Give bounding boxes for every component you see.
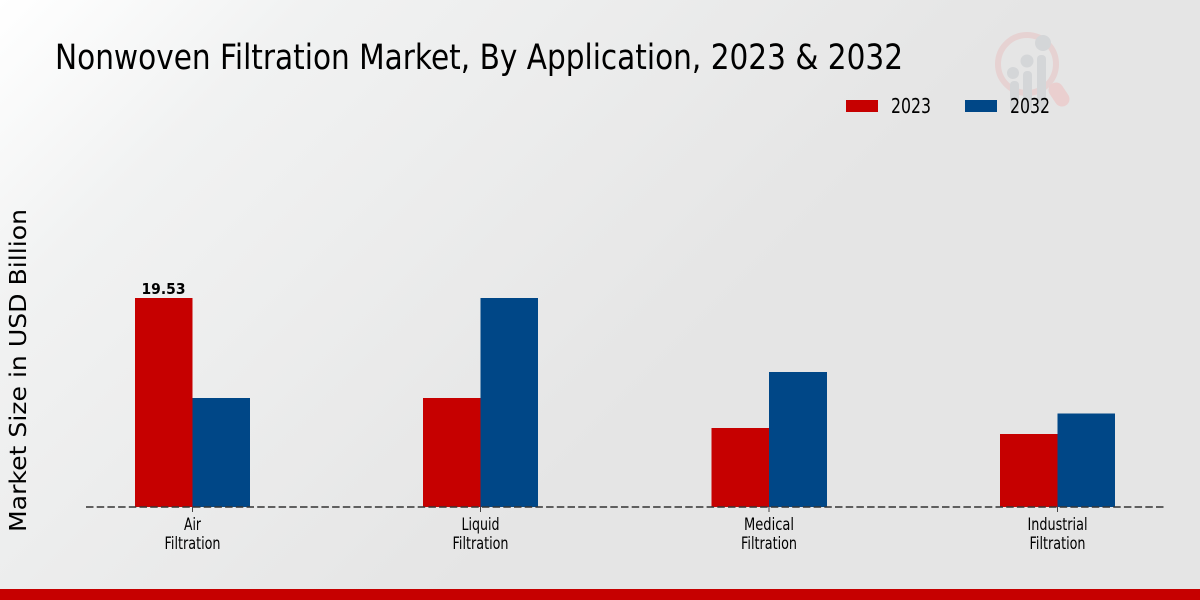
icon: watermark logo (998, 35, 1062, 111)
x label: Liquid Filtration (452, 515, 508, 554)
legend (846, 94, 1050, 118)
group: Liquid Filtration (423, 298, 538, 507)
x label: Industrial Filtration (1028, 515, 1088, 554)
x label: Medical Filtration: Filtration (741, 534, 797, 554)
x label: Industrial Filtration: Industrial (1028, 515, 1088, 535)
group: Medical Filtration (712, 372, 827, 507)
x label: Medical Filtration: Medical (744, 515, 794, 535)
x label: Medical Filtration (741, 515, 797, 554)
y-axis label: Market Size in USD Billion (6, 209, 32, 532)
x label: Liquid Filtration: Filtration (452, 534, 508, 554)
legend item: 2023 (846, 94, 931, 118)
x label: Industrial Filtration: Filtration (1030, 534, 1086, 554)
group: Air Filtration (135, 280, 250, 507)
x label: Air Filtration: Air (184, 515, 201, 535)
footer bar (0, 589, 1200, 600)
bar chart (86, 280, 1164, 554)
x label: Air Filtration (164, 515, 220, 554)
legend item: 2023: 2023 (891, 94, 931, 118)
value label: 19.53 (142, 280, 186, 298)
x label: Air Filtration: Filtration (164, 534, 220, 554)
legend item: 2032 (965, 94, 1050, 118)
legend item: 2032: 2032 (1010, 94, 1050, 118)
x label: Liquid Filtration: Liquid (462, 515, 500, 535)
x-axis baseline (86, 506, 1164, 508)
title: Nonwoven Filtration Market, By Application, 2023 & 2032 (55, 38, 903, 78)
group: Industrial Filtration (1000, 414, 1115, 507)
